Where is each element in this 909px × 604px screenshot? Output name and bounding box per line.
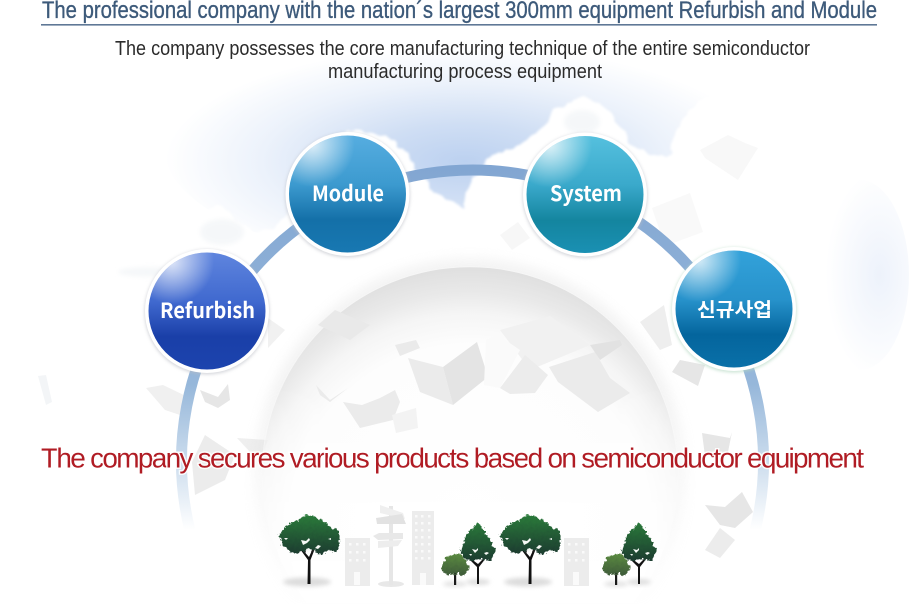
node: Refurbish: Refurbish xyxy=(160,295,255,325)
tree: large centre xyxy=(499,515,561,586)
subtitle xyxy=(115,38,810,83)
town illustration xyxy=(278,505,657,587)
scattered paper sheets xyxy=(38,135,758,558)
signpost xyxy=(373,505,406,587)
tree: small olive xyxy=(441,554,469,587)
tree: conifer right xyxy=(621,522,657,585)
node: new business: 신규사업 xyxy=(697,299,772,321)
building: tall xyxy=(412,511,434,585)
node: Module: Module xyxy=(312,178,384,208)
node: new business xyxy=(672,247,796,372)
tree: large left xyxy=(278,515,340,586)
node: System xyxy=(522,132,648,258)
tree: conifer xyxy=(460,522,496,585)
node: System: System xyxy=(550,178,622,208)
connecting ring arc xyxy=(182,170,763,530)
node: Module xyxy=(285,132,410,258)
tree: small olive right xyxy=(602,554,630,587)
building: short left xyxy=(345,538,370,586)
red statement: The company secures various products based on semiconductor equipment xyxy=(41,442,864,474)
node: Refurbish xyxy=(144,249,270,374)
subtitle: manufacturing process equipment xyxy=(328,61,602,83)
central dome xyxy=(264,262,677,457)
paper sheets inside dome xyxy=(316,310,630,433)
building: short right xyxy=(564,538,589,586)
subtitle: The company possesses the core manufacturing technique of the entire semiconductor xyxy=(115,38,810,60)
